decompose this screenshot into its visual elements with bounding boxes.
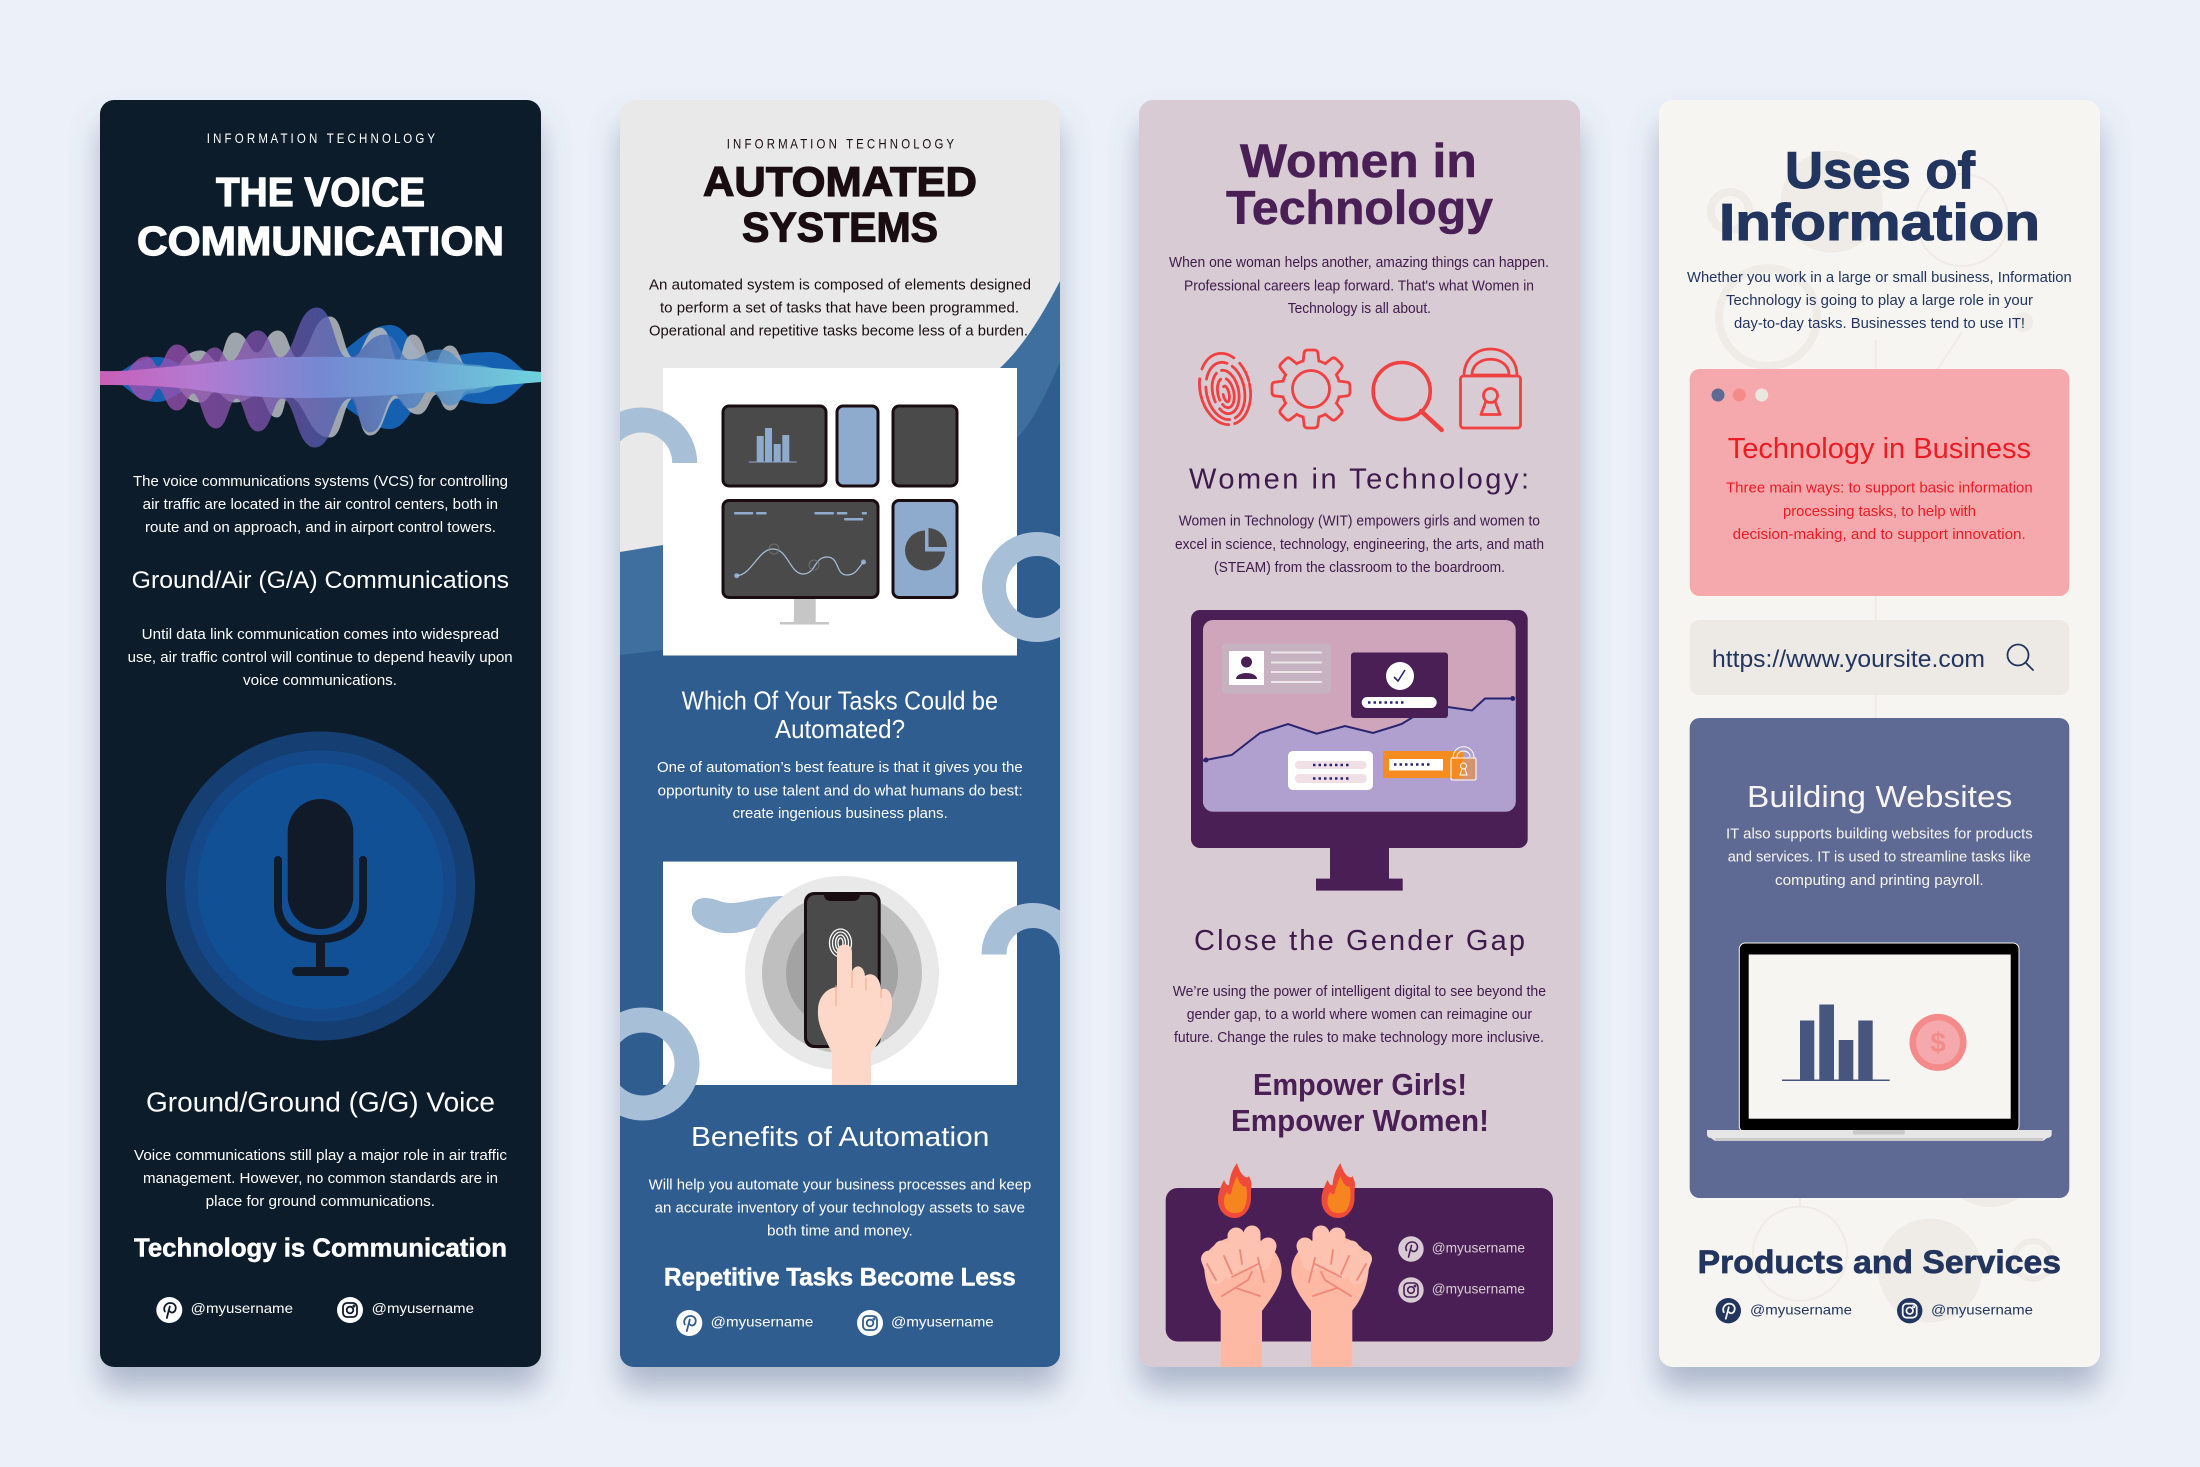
title: THE VOICE (216, 169, 425, 215)
card: technology in business (1690, 369, 2069, 596)
tagline: Repetitive Tasks Become Less (664, 1264, 1016, 1292)
social: pinterest (156, 1297, 293, 1323)
sound waveform (100, 310, 541, 445)
heading: Technology in Business (1728, 433, 2031, 465)
intro paragraph: Operational and repetitive tasks become less of a burden. (649, 324, 1028, 340)
paragraph: decision-making, and to support innovation. (1733, 527, 2026, 543)
intro paragraph: An automated system is composed of elements designed (649, 278, 1031, 294)
intro paragraph: The voice communications systems (VCS) for controlling (133, 474, 508, 490)
intro paragraph: Technology is going to play a large role in your (1726, 293, 2033, 309)
heading: ground/ground: Ground/Ground (G/G) Voice (146, 1087, 495, 1118)
intro paragraph (1169, 255, 1549, 317)
title: AUTOMATED (703, 158, 977, 205)
tasks paragraph (657, 760, 1023, 822)
paragraph: Three main ways: to support basic information (1726, 481, 2033, 497)
social: pinterest: @myusername (711, 1314, 814, 1330)
icon: magnifier (1373, 362, 1442, 430)
tagline: Empower Girls! (1253, 1067, 1467, 1102)
paragraph: processing tasks, to help with (1783, 504, 1976, 520)
ground/ground paragraph: management. However, no common standards are in (143, 1171, 498, 1187)
tagline: Products and Services (1698, 1244, 2061, 1280)
title (703, 158, 977, 250)
intro paragraph: Whether you work in a large or small business, Information (1687, 270, 2072, 286)
intro paragraph: to perform a set of tasks that have been programmed. (660, 300, 1019, 316)
title (1719, 142, 2040, 252)
intro paragraph: day-to-day tasks. Businesses tend to use IT! (1734, 316, 2025, 332)
gender gap paragraph: gender gap, to a world where women can reimagine our (1187, 1007, 1532, 1023)
social: instagram: @myusername (1931, 1302, 2033, 1318)
panel: the voice communication (100, 100, 541, 1367)
title: Women in (1240, 134, 1477, 187)
gender gap paragraph (1173, 984, 1546, 1046)
eyebrow: I N F O R M A T I O N T E C H N O L O G Y (727, 136, 955, 152)
search bar (1690, 620, 2069, 695)
intro paragraph: When one woman helps another, amazing things can happen. (1169, 255, 1549, 271)
benefits paragraph: Will help you automate your business processes and keep (649, 1178, 1031, 1194)
panel: women in technology (1139, 100, 1580, 1367)
intro paragraph (649, 278, 1031, 340)
icon: flames (1218, 1163, 1355, 1218)
illustration: laptop with chart and coin: $ (1930, 1027, 1946, 1058)
social: instagram (1398, 1277, 1525, 1303)
wit paragraph: excel in science, technology, engineering, the arts, and math (1175, 537, 1544, 553)
social: pinterest: @myusername (191, 1300, 293, 1316)
icon: gear (1272, 350, 1350, 428)
ground/air paragraph: voice communications. (243, 673, 397, 689)
intro paragraph: Technology is all about. (1288, 301, 1431, 317)
social: instagram (337, 1297, 474, 1323)
heading: women in technology: Women in Technology: (1189, 464, 1529, 496)
social: pinterest (1398, 1236, 1525, 1262)
icon: microphone in circles (166, 732, 475, 1040)
title: Uses of (1785, 142, 1976, 200)
decor: right ring (994, 544, 1080, 630)
benefits paragraph: both time and money. (767, 1224, 913, 1240)
icon: raised fists (1204, 1234, 1369, 1367)
blue background shapes (620, 281, 1060, 1367)
wit paragraph (1175, 514, 1544, 576)
card: building websites (1690, 718, 2069, 1198)
search bar: https://www.yoursite.com (1712, 646, 1985, 673)
social: instagram: @myusername (372, 1300, 474, 1316)
paragraph: computing and printing payroll. (1775, 873, 1984, 889)
social: pinterest: @myusername (1432, 1240, 1525, 1256)
heading: ground/air: Ground/Air (G/A) Communications (132, 567, 509, 594)
tasks paragraph: create ingenious business plans. (733, 806, 948, 822)
wit paragraph: Women in Technology (WIT) empowers girls and women to (1179, 514, 1540, 530)
heading: Building Websites (1747, 779, 2012, 814)
decor: left ring (599, 1020, 687, 1108)
icon: fingerprint (1193, 349, 1257, 429)
decor: faint circuit circles (1711, 151, 2052, 1323)
intro paragraph: route and on approach, and in airport control towers. (145, 520, 496, 536)
title: Technology (1226, 181, 1493, 234)
intro paragraph (133, 474, 508, 536)
social: instagram: @myusername (1432, 1281, 1525, 1297)
gender gap paragraph: We’re using the power of intelligent digital to see beyond the (1173, 984, 1546, 1000)
heading: tasks (682, 686, 998, 744)
social: instagram (857, 1310, 994, 1336)
heading: benefits: Benefits of Automation (691, 1121, 989, 1152)
eyebrow: I N F O R M A T I O N T E C H N O L O G Y (207, 130, 436, 146)
social: instagram: @myusername (891, 1314, 994, 1330)
title: Information (1719, 194, 2040, 252)
illustration: dashboard screens (663, 368, 1017, 656)
benefits paragraph: an accurate inventory of your technology assets to save (655, 1200, 1025, 1216)
heading: gender gap: Close the Gender Gap (1194, 925, 1525, 957)
window dots (1712, 388, 1768, 402)
tagline: Technology is Communication (134, 1233, 507, 1263)
ground/ground paragraph (134, 1148, 507, 1210)
title: SYSTEMS (742, 204, 938, 250)
icon: padlock (1460, 349, 1520, 428)
heading: tasks: Which Of Your Tasks Could be (682, 686, 998, 716)
title: COMMUNICATION (137, 218, 504, 264)
decor: top-left arc (620, 408, 698, 463)
intro paragraph: air traffic are located in the air control centers, both in (143, 497, 498, 513)
ground/air paragraph (128, 627, 513, 689)
social: pinterest: @myusername (1750, 1302, 1852, 1318)
tagline: Empower Women! (1231, 1103, 1489, 1138)
illustration: monitor with chart (1191, 610, 1528, 891)
ground/air paragraph: use, air traffic control will continue to depend heavily upon (128, 650, 513, 666)
ground/air paragraph: Until data link communication comes into widespread (142, 627, 499, 643)
heading: tasks: Automated? (775, 714, 905, 744)
title (137, 169, 504, 264)
social: instagram (1897, 1298, 2033, 1323)
footer band (1166, 1188, 1553, 1342)
decor: right arc (982, 903, 1060, 954)
paragraph (1726, 826, 2033, 889)
illustration: fingerprint phone (663, 862, 1017, 1085)
tasks paragraph: One of automation’s best feature is that it gives you the (657, 760, 1023, 776)
paragraph: IT also supports building websites for products (1726, 826, 2033, 842)
social: pinterest (676, 1310, 814, 1336)
illustration: laptop with chart and coin (1707, 943, 2052, 1141)
title (1226, 134, 1493, 234)
ground/ground paragraph: Voice communications still play a major role in air traffic (134, 1148, 507, 1164)
benefits paragraph (649, 1178, 1031, 1240)
panel: uses of information (1659, 100, 2100, 1367)
social: pinterest (1716, 1298, 1852, 1323)
paragraph: and services. IT is used to streamline tasks like (1728, 850, 2031, 866)
tagline (1231, 1067, 1489, 1138)
ground/ground paragraph: place for ground communications. (206, 1194, 435, 1210)
intro paragraph (1687, 270, 2072, 332)
tasks paragraph: opportunity to use talent and do what humans do best: (658, 784, 1023, 800)
gender gap paragraph: future. Change the rules to make technology more inclusive. (1174, 1030, 1544, 1046)
wit paragraph: (STEAM) from the classroom to the boardroom. (1214, 560, 1505, 576)
intro paragraph: Professional careers leap forward. That's what Women in (1184, 278, 1534, 294)
paragraph (1726, 481, 2033, 543)
panel: automated systems (599, 100, 1080, 1367)
